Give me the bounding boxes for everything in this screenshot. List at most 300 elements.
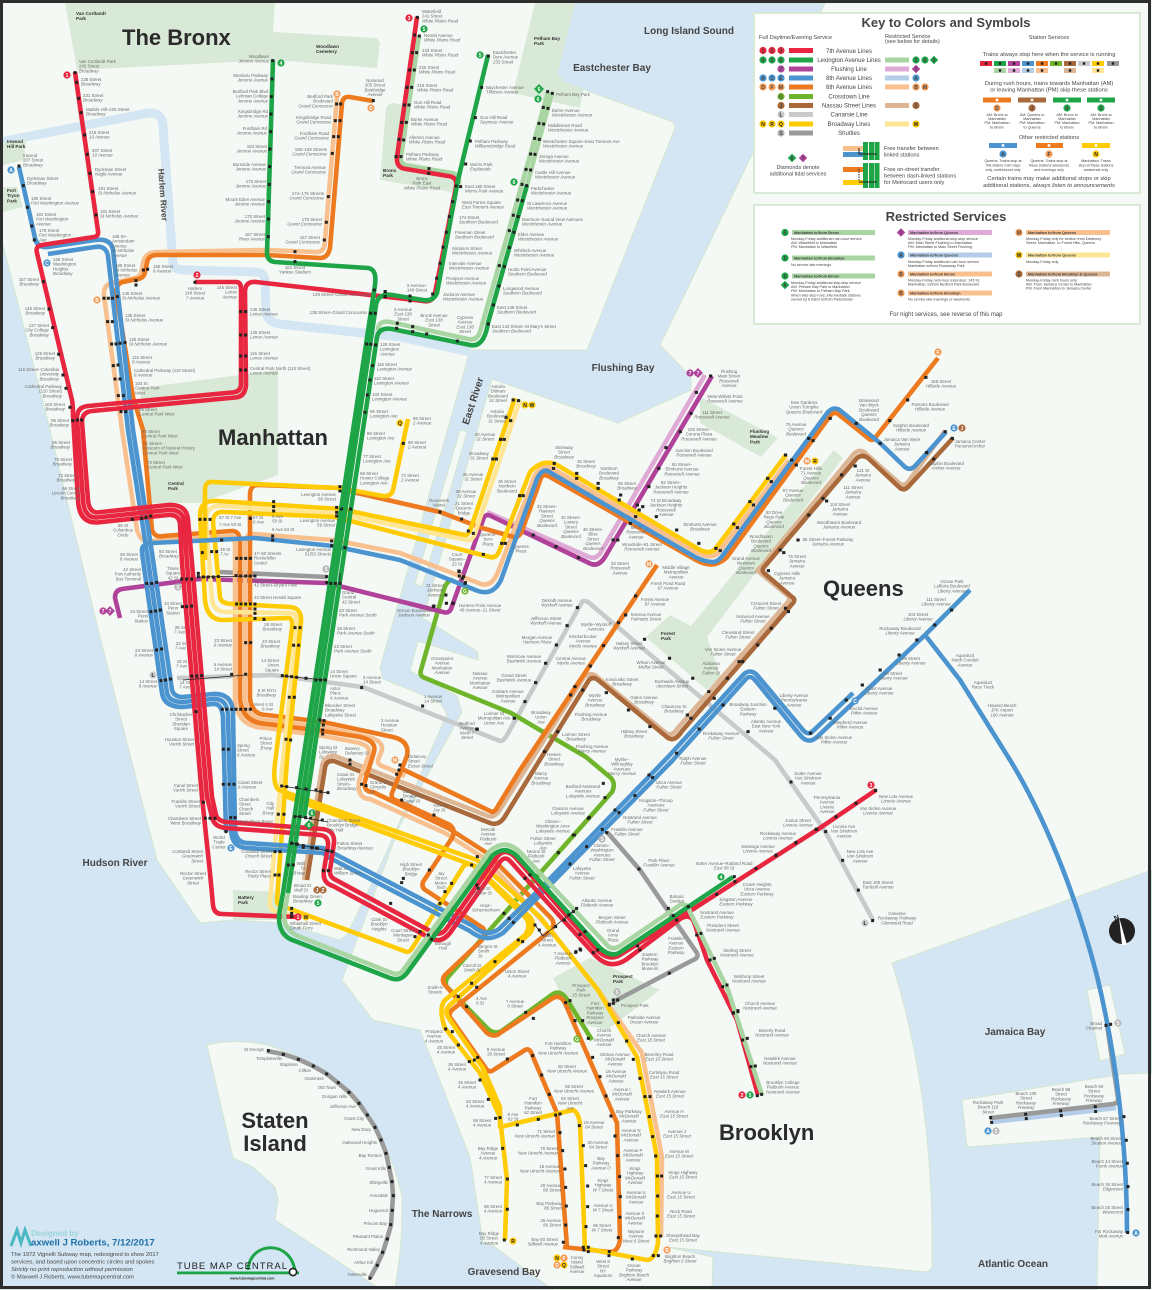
- station labels: midtown and lower Manhattan: 14 Street: [261, 658, 279, 663]
- station labels: south Brooklyn: Avenue: [627, 1220, 643, 1225]
- station labels: downtown Brooklyn: Avenues: [647, 803, 665, 808]
- station labels: Queens: Union: [535, 715, 547, 720]
- station labels: Queens: Boulevard: [859, 407, 879, 412]
- station labels: south Brooklyn: Ocean: [628, 1263, 640, 1268]
- station labels: Queens: Avenue: [786, 702, 802, 707]
- restricted: service descriptions: No service late evenings: [791, 263, 831, 267]
- service badges on map: 5: [317, 901, 320, 907]
- station labels: Queens: 65 Street: [618, 481, 636, 486]
- station labels: Queens: 63 Drive: [766, 510, 782, 515]
- station labels: Rockaways: Channel: [1086, 1026, 1102, 1031]
- station labels: Manhattan west and Bronx: 116 Street: [250, 351, 270, 356]
- station labels: Staten Island: Tompkinsville: [256, 1056, 283, 1061]
- station labels: downtown Brooklyn: Hoyt–: [480, 903, 492, 908]
- station labels: Queens: 39 Avenue: [456, 489, 476, 494]
- station labels: downtown Brooklyn: Fulton Street: [627, 820, 653, 825]
- station labels: downtown Brooklyn: Van Sinderen: [831, 829, 858, 834]
- station labels: south Brooklyn: 4 Avenue: [484, 1209, 503, 1214]
- station labels: Queens: Broadway: [544, 761, 565, 766]
- station labels: Manhattan west and Bronx: Central Park West: [142, 434, 178, 439]
- station labels: Bronx east: Parkchester: [531, 186, 554, 191]
- station labels: Bronx east: Cypress: [457, 315, 473, 320]
- panel: restricted services: [754, 205, 1140, 324]
- station labels: Rockaways: Freeway: [1018, 1105, 1035, 1110]
- station labels: south Brooklyn: Ave: [565, 1105, 574, 1110]
- station labels: Manhattan west and Bronx: Jerome Avenue: [237, 59, 270, 64]
- station labels: midtown and lower Manhattan: Street: [408, 759, 420, 764]
- designer credit: axwell J Roberts, 7/12/2017: [31, 1238, 155, 1248]
- station labels: Queens: Nassau: [473, 671, 487, 676]
- station labels: Queens: Boulevard: [736, 570, 756, 575]
- station labels: Queens: Queens: [539, 518, 555, 523]
- station labels: downtown Brooklyn: Flatbush Avenue: [581, 903, 614, 908]
- station labels: midtown and lower Manhattan: Lexington Avenue: [301, 492, 336, 497]
- station labels: Queens: Myrtle–Wyckoff: [581, 622, 611, 627]
- restricted: service badges: M: [1017, 230, 1021, 236]
- station labels: downtown Brooklyn: Lafayette: [534, 841, 553, 846]
- station labels: Queens: boro: [484, 537, 493, 542]
- station labels: Queens: Main Street: [718, 374, 741, 379]
- restricted: service badges: A: [899, 253, 903, 259]
- station labels: midtown and lower Manhattan: Bus Terminal: [116, 576, 141, 581]
- station labels: Queens: Bliss: [588, 532, 598, 537]
- station labels: downtown Brooklyn: 9 St: [476, 1001, 485, 1006]
- station labels: Queens: Archer Avenue: [931, 466, 961, 471]
- station labels: Queens: Sutphin Boulevard: [893, 423, 929, 428]
- station labels: downtown Brooklyn: Nostrand Avenue: [623, 815, 657, 820]
- station labels: downtown Brooklyn: Parkway: [642, 957, 659, 962]
- station labels: Queens: Woodhaven: [749, 534, 773, 539]
- station labels: Bronx east: Westchester Avenue: [527, 206, 568, 211]
- station labels: Rockaways: Beach 36 Street: [1092, 1182, 1123, 1187]
- station labels: south Brooklyn: New Utrecht Avenue: [538, 1050, 579, 1055]
- key: service badges: N: [1094, 152, 1098, 158]
- station labels: midtown and lower Manhattan: Penn: [168, 606, 179, 611]
- station labels: Bronx east: Eastchester: [493, 50, 516, 55]
- station labels: downtown Brooklyn: Eastern: [668, 945, 684, 950]
- station labels: Manhattan west and Bronx: Bedford Park: [307, 94, 333, 99]
- station labels: Queens: 23 St: [452, 561, 463, 566]
- park names: Forest: [661, 631, 675, 636]
- station labels: Queens: Aberdeen Street: [655, 684, 689, 689]
- station labels: midtown and lower Manhattan: 23 Street: [262, 639, 280, 644]
- station labels: Bronx east: 174 Street: [459, 215, 479, 220]
- station labels: south Brooklyn: Avenue P: [624, 1148, 642, 1153]
- station labels: Bronx east: Westchester Avenue: [518, 237, 559, 242]
- station labels: downtown Brooklyn: Pennsylvania: [814, 795, 840, 800]
- station labels: Bronx east: Morris Park: [470, 162, 492, 167]
- station labels: downtown Brooklyn: Nostrand Avenue: [700, 910, 734, 915]
- station labels: midtown and lower Manhattan: 28 Street: [337, 626, 355, 631]
- restricted: service badges: Z: [1017, 272, 1021, 278]
- station labels: south Brooklyn: Avenue: [607, 1061, 623, 1066]
- station labels: Queens: Liberty Avenue: [937, 588, 967, 593]
- station labels: Queens: Broadway: [576, 464, 597, 469]
- station labels: Manhattan west and Bronx: Lincoln Center: [52, 491, 81, 496]
- service badges on map: S: [600, 837, 604, 843]
- key: station service swatches: AM: Bronx to: [986, 113, 1008, 117]
- station labels: south Brooklyn: Kings Highway: [668, 1170, 698, 1175]
- station labels: midtown and lower Manhattan: St: [370, 789, 375, 794]
- station labels: Queens: Broadway: [566, 737, 587, 742]
- station labels: midtown and lower Manhattan: Rector Street: [245, 869, 271, 874]
- station labels: Bronx east: Intervale Avenue: [449, 261, 482, 266]
- station labels: Bronx east: Avenue: [458, 320, 473, 325]
- station labels: downtown Brooklyn: 15 Street: [572, 992, 591, 997]
- station labels: downtown Brooklyn: Prospect Park: [621, 1003, 649, 1008]
- station labels: downtown Brooklyn: Park Place: [648, 858, 670, 863]
- station labels: Queens: 111 Street: [843, 485, 863, 490]
- station labels: Manhattan west and Bronx: 155 Street: [115, 263, 135, 268]
- station labels: Queens: Avenues: [613, 766, 631, 771]
- station labels: south Brooklyn: 62 Street: [561, 1096, 579, 1101]
- station labels: south Brooklyn: McDonald: [619, 1114, 639, 1119]
- station labels: Rockaways: Street: [1088, 1089, 1101, 1094]
- key: line colour rows: 6th Avenue Lines: [826, 85, 872, 91]
- station labels: Queens: DeKalb Avenue: [542, 598, 572, 603]
- station labels: Queens: Roosevelt: [656, 507, 677, 512]
- station labels: Manhattan west and Bronx: Grand Concourse: [287, 222, 323, 227]
- station labels: Queens: 46 Street: [577, 459, 595, 464]
- station labels: Manhattan west and Bronx: 207 Street: [92, 148, 112, 153]
- station labels: downtown Brooklyn: Clinton–: [545, 819, 561, 824]
- station labels: Queens: Avenue: [789, 563, 805, 568]
- station labels: Bronx east: East 143 Street–St Mary's Street: [492, 324, 556, 329]
- station labels: south Brooklyn: East 15 Street: [667, 1195, 696, 1200]
- key: service badges: M: [779, 85, 783, 91]
- borough titles: The Bronx: [122, 25, 232, 50]
- key: station service swatches: always listen to announcements: [1033, 183, 1115, 189]
- key: transfer symbols: [843, 142, 956, 188]
- station labels: Manhattan west and Bronx: 145 Street: [122, 291, 142, 296]
- station labels: Queens: Broadway: [581, 717, 602, 722]
- key: station service swatches: additional stations,: [983, 183, 1033, 189]
- park names: Woodlawn: [316, 44, 339, 49]
- station labels: Manhattan west and Bronx: Broadway: [39, 376, 60, 381]
- station labels: Bronx east: Westchester Square–East Tremont Ave: [543, 139, 620, 144]
- station labels: Queens: Broadway: [585, 702, 606, 707]
- station labels: south Brooklyn: Bay Ridge: [479, 1231, 499, 1236]
- station labels: Bronx east: East 138: [394, 312, 412, 317]
- station labels: Manhattan west and Bronx: 116 Street–Columbia: [18, 367, 59, 372]
- station labels: Queens: Alabama: [702, 661, 720, 666]
- station labels: downtown Brooklyn: Lafayette: [573, 866, 591, 871]
- station labels: downtown Brooklyn: Ave: [531, 858, 540, 863]
- restricted: service badges: 6: [784, 283, 787, 289]
- station labels: Manhattan west and Bronx: Jerome Avenue: [233, 202, 266, 207]
- park names: Bronx: [383, 168, 396, 173]
- station labels: south Brooklyn: 4 Avenue: [425, 1038, 444, 1043]
- station labels: Bronx east: White Plains Road: [419, 70, 456, 75]
- park names: Park: [661, 636, 671, 641]
- station labels: downtown Brooklyn: Union Street: [505, 969, 529, 974]
- station labels: Manhattan west and Bronx: Grand Concourse: [291, 170, 327, 175]
- station labels: Queens: Union Ave: [484, 720, 505, 725]
- station labels: Manhattan west and Bronx: Bedford Park Blvd: [233, 89, 268, 94]
- station labels: midtown and lower Manhattan: Ave: [483, 841, 492, 846]
- station labels: Manhattan west and Bronx: St Nicholas Avenue: [129, 342, 168, 347]
- station labels: midtown and lower Manhattan: Hall: [266, 806, 274, 811]
- station labels: Bronx east: Morris Park Avenue: [465, 189, 504, 194]
- station labels: Manhattan west and Bronx: Broadway: [60, 495, 81, 500]
- station labels: Queens: 75 Street: [788, 554, 806, 559]
- station labels: midtown and lower Manhattan: 8 Avenue: [135, 653, 154, 658]
- restricted: service descriptions: When skip-stop runs, intermediate stations: [791, 293, 861, 297]
- station labels: Manhattan west and Bronx: 86 Street: [142, 429, 160, 434]
- station labels: downtown Brooklyn: Newkirk Avenue: [764, 1056, 796, 1061]
- station labels: Staten Island: Stapleton: [279, 1062, 299, 1067]
- station labels: Manhattan west and Bronx: Washington: [53, 262, 77, 267]
- station labels: Rockaways: Freeway: [1053, 1101, 1070, 1106]
- station labels: south Brooklyn: Stillwell Avenue: [527, 1242, 559, 1247]
- key: station service swatches: Manhattan: Trains: [1081, 159, 1111, 163]
- station labels: midtown and lower Manhattan: Spring: [237, 743, 250, 748]
- station labels: south Brooklyn: Avenue: [427, 1034, 442, 1039]
- restricted: service titles: [794, 231, 1097, 296]
- service badges on map: J: [961, 426, 964, 432]
- station labels: Bronx east: Longwood Avenue: [503, 286, 539, 291]
- station labels: Manhattan west and Bronx: Fort Washington: [36, 217, 69, 222]
- key: line colour rows: Crosstown Line: [828, 94, 870, 100]
- station labels: Queens: 31 Street: [470, 456, 489, 461]
- station labels: Manhattan west and Bronx: Mosholu Parkway: [233, 73, 268, 78]
- station labels: midtown and lower Manhattan: Lexington Avenue: [296, 547, 331, 552]
- service badges on map: S: [615, 990, 619, 996]
- station labels: south Brooklyn: Parkside Avenue: [628, 1015, 660, 1020]
- station labels: Manhattan west and Bronx: (110 Street): [39, 389, 63, 394]
- station labels: Queens: Broadway: [664, 709, 685, 714]
- key: service badges: D: [995, 106, 999, 112]
- station labels: midtown and lower Manhattan: 8 Avenue: [120, 557, 139, 562]
- station labels: south Brooklyn: McDonald: [625, 1216, 645, 1221]
- key: service badges: 2: [771, 48, 774, 54]
- station labels: Manhattan west and Bronx: Central Park West: [143, 450, 179, 455]
- station labels: south Brooklyn: Newkirk Avenue: [654, 1089, 686, 1094]
- key: service badges: 3: [780, 48, 783, 54]
- station labels: south Brooklyn: New Utrecht Avenue: [554, 1089, 595, 1094]
- station labels: Manhattan west and Bronx: St Nicholas Avenue: [98, 191, 137, 196]
- station labels: Bronx east: East Tremont Avenue: [462, 205, 504, 210]
- park names: Park: [750, 439, 760, 444]
- station labels: Bronx east: 233 Street: [492, 59, 514, 64]
- station labels: Bronx east: Southern Boulevard: [497, 310, 536, 315]
- station labels: downtown Brooklyn: Brooklyn: [402, 867, 420, 872]
- station labels: downtown Brooklyn: Atlantic Avenue: [582, 898, 612, 903]
- station labels: downtown Brooklyn: Winthrop Street: [734, 974, 764, 979]
- station labels: downtown Brooklyn: Livonia Avenue: [763, 836, 793, 841]
- station labels: downtown Brooklyn: Utica Avenue: [656, 780, 682, 785]
- station labels: Queens: Eastern: [740, 707, 756, 712]
- station labels: Queens: Avenue: [721, 383, 737, 388]
- key: station service swatches: Manhattan: [1058, 117, 1076, 121]
- restricted: service descriptions: PM: Manhattan to Wakefield: [791, 245, 837, 249]
- station labels: Queens: Kew Gardens: [791, 400, 817, 405]
- station labels: midtown and lower Manhattan: 42 Street: [123, 567, 141, 572]
- station labels: Queens: Myrtle Avenue: [569, 643, 597, 648]
- station labels: midtown and lower Manhattan: 47–50 Streets: [254, 551, 281, 556]
- station labels: Bronx east: Park East: [412, 181, 432, 186]
- station labels: Staten Island: Princes Bay: [364, 1221, 388, 1226]
- station labels: Queens: Boulevard: [537, 523, 557, 528]
- station labels: Queens: Broadway: [690, 527, 711, 532]
- station labels: Queens: 67 Avenue: [783, 488, 803, 493]
- station labels: Queens: Sutphin Boulevard: [928, 461, 964, 466]
- station labels: midtown and lower Manhattan: Avenue: [481, 832, 496, 837]
- station labels: south Brooklyn: Avenue: [627, 1180, 643, 1185]
- designer credit: [11, 1229, 159, 1280]
- station labels: Manhattan west and Bronx: 72 Street: [401, 473, 419, 478]
- station labels: midtown and lower Manhattan: Times: [167, 566, 179, 571]
- station labels: Queens: 111 Street: [702, 410, 722, 415]
- station labels: Queens: Pitkin Avenue: [837, 725, 864, 730]
- restricted: service descriptions: served by 6 trains to/from Parkchester: [791, 297, 854, 301]
- station labels: Manhattan west and Bronx: 238 Street: [81, 77, 101, 82]
- station labels: Bronx east: Pelham Bay Park: [556, 92, 591, 97]
- panel: key to colors and symbols: Full Daytime/Evening Service: [759, 35, 832, 41]
- station labels: Manhattan west and Bronx: 183 Street: [247, 144, 267, 149]
- station labels: midtown and lower Manhattan: Broadway-Nassau: [337, 846, 373, 851]
- station labels: Queens: Northern: [498, 484, 516, 489]
- tube map central logo: TUBE MAP CENTRAL: [177, 1261, 287, 1272]
- station labels: south Brooklyn: Avenue: [481, 1151, 496, 1156]
- station labels: Staten Island: Jefferson Ave: [330, 1104, 357, 1109]
- restricted: service titles: Manhattan to/from Brooklyn: [910, 292, 961, 296]
- station labels: Queens: Avenue: [427, 592, 443, 597]
- park names: Inwood: [7, 139, 23, 144]
- key: service badges: A: [914, 76, 918, 82]
- station labels: downtown Brooklyn: Bergen St: [478, 944, 498, 949]
- station labels: Queens: Boulevard: [487, 414, 507, 419]
- park names: Battery: [238, 895, 254, 900]
- station labels: midtown and lower Manhattan: 57 St 7 Ave: [219, 515, 242, 520]
- station labels: midtown and lower Manhattan: Varick Street: [175, 804, 201, 809]
- panel: key to colors and symbols: Station Services: [1029, 35, 1069, 41]
- station labels: Bronx east: Esplanade: [470, 167, 491, 172]
- station labels: Bronx east: Nereid Avenue: [424, 33, 453, 38]
- station labels: Manhattan west and Bronx: 72 Street: [147, 460, 165, 465]
- station labels: south Brooklyn: Aquarium: [594, 1273, 613, 1278]
- station labels: downtown Brooklyn: Livonia Avenue: [863, 811, 893, 816]
- service badges on map: M: [647, 562, 651, 568]
- station labels: midtown and lower Manhattan: Fulton Street: [337, 841, 362, 846]
- station labels: Queens: Queens-: [456, 506, 473, 511]
- water names: Long Island Sound: [644, 26, 734, 37]
- station labels: Bronx east: Buhre Avenue: [552, 108, 580, 113]
- key: service badges: A: [1001, 152, 1005, 158]
- service badges on map: E: [229, 846, 233, 852]
- restricted: service descriptions: No service late evenings or weekends: [908, 298, 970, 302]
- station labels: downtown Brooklyn: Heights: [372, 926, 387, 931]
- station labels: midtown and lower Manhattan: Brooklyn Bridge-: [327, 823, 360, 828]
- restricted: service titles: Manhattan to/from Bronx: [910, 272, 956, 276]
- key: service badges: Q: [779, 122, 783, 128]
- station labels: Queens: Avenue: [704, 666, 719, 671]
- station labels: south Brooklyn: 55 Street: [565, 1084, 583, 1089]
- station labels: Queens: Myrtle Avenue: [557, 661, 585, 666]
- station labels: Bronx east: Southern Boulevard: [492, 329, 531, 334]
- station labels: downtown Brooklyn: Avenue: [575, 871, 590, 876]
- station labels: Queens: Boulevard: [599, 471, 619, 476]
- station labels: Manhattan west and Bronx: 205 Street: [365, 83, 386, 88]
- station labels: Queens: Jamaica Avenue: [822, 525, 856, 530]
- station labels: downtown Brooklyn: Fulton Street: [643, 807, 669, 812]
- station labels: south Brooklyn: Avenue: [625, 1157, 641, 1162]
- station labels: midtown and lower Manhattan: Cortlandt Street: [241, 849, 272, 854]
- station labels: midtown and lower Manhattan: 6 Ave: [253, 520, 265, 525]
- station labels: Bronx east: Westchester Avenue: [531, 191, 572, 196]
- station labels: Queens: Avenues: [587, 627, 605, 632]
- station labels: Manhattan west and Bronx: 138 Street–Grand Concourse: [310, 310, 368, 315]
- station labels: south Brooklyn: Kings: [598, 1178, 608, 1183]
- station labels: south Brooklyn: W 7 Street: [593, 1187, 614, 1192]
- station labels: Queens: Crescent Street: [751, 601, 781, 606]
- station labels: downtown Brooklyn: Lafayette Avenue: [566, 793, 601, 798]
- station labels: downtown Brooklyn: Junius Street: [785, 818, 811, 823]
- key: station service swatches: to Bronx: [1060, 125, 1074, 129]
- key: service badges: E: [779, 76, 783, 82]
- station labels: Manhattan west and Bronx: 10 Avenue: [89, 135, 110, 140]
- station labels: midtown and lower Manhattan: Street: [239, 802, 251, 807]
- station labels: Queens: Rawson: [539, 509, 555, 514]
- park names: Hill Park: [7, 144, 26, 149]
- station labels: midtown and lower Manhattan: Broadway: [325, 708, 345, 713]
- station labels: midtown and lower Manhattan: Circle: [117, 532, 129, 537]
- station labels: south Brooklyn: 39 Street: [487, 1052, 506, 1057]
- station labels: Manhattan west and Bronx: 96 Street: [413, 416, 431, 421]
- station labels: Manhattan west and Bronx: 103 Street: [45, 402, 65, 407]
- station labels: Staten Island: Dongan Hills: [322, 1094, 348, 1099]
- station labels: Bronx east: Street: [397, 316, 410, 321]
- station labels: midtown and lower Manhattan: Lexington Avenue: [300, 518, 335, 523]
- station labels: Manhattan west and Bronx: 149 Street–Grand Concourse: [313, 292, 371, 297]
- station labels: midtown and lower Manhattan: Chambers: [239, 797, 259, 802]
- park names: Flushing: [750, 429, 769, 434]
- station labels: Queens: 67 Avenue: [645, 602, 666, 607]
- station labels: Queens: 31 Street: [476, 437, 495, 442]
- station labels: downtown Brooklyn: East 105 Street: [863, 880, 893, 885]
- station labels: midtown and lower Manhattan: Chambers Street: [327, 818, 360, 823]
- station labels: midtown and lower Manhattan: 18 St: [177, 659, 187, 664]
- station labels: Queens: Queens: [738, 565, 754, 570]
- station labels: Staten Island: Grasmere: [304, 1076, 325, 1081]
- park names: Park: [7, 198, 17, 203]
- key: station service swatches: Queens: Trains stop at: [1030, 159, 1068, 163]
- station labels: Queens: Jamaica: [844, 490, 862, 495]
- panel: key to colors and symbols: [754, 13, 1140, 193]
- station labels: Staten Island: Great Kills: [366, 1166, 387, 1171]
- station labels: Queens: Street: [548, 757, 561, 762]
- station labels: Manhattan west and Bronx: 148 Street: [185, 291, 206, 296]
- station labels: Queens: Queens Boulevard: [786, 409, 823, 414]
- station labels: downtown Brooklyn: High Street: [400, 862, 422, 867]
- station labels: Queens: Avenue: [894, 446, 910, 451]
- transfer links: [183, 573, 577, 936]
- station labels: Queens: Roosevelt: [626, 530, 647, 535]
- station labels: Queens: Street: [558, 450, 571, 455]
- station labels: south Brooklyn: Bay Ridge: [478, 1146, 498, 1151]
- station labels: Queens: Hillside Avenue: [926, 384, 957, 389]
- station labels: downtown Brooklyn: Army: [608, 933, 619, 938]
- station labels: south Brooklyn: McDonald: [623, 1153, 643, 1158]
- station labels: south Brooklyn: Neck Road: [670, 1209, 692, 1214]
- station labels: downtown Brooklyn: Smith St: [464, 968, 481, 973]
- station labels: Queens: Union Turnpike: [789, 405, 819, 410]
- station labels: Manhattan west and Bronx: Dyckman Street: [95, 167, 126, 172]
- station labels: Staten Island: Pleasant Plains: [353, 1234, 384, 1239]
- service badges on map: Q: [398, 421, 402, 427]
- station labels: Manhattan west and Bronx: Avenue: [367, 92, 383, 97]
- park names: Park: [238, 900, 248, 905]
